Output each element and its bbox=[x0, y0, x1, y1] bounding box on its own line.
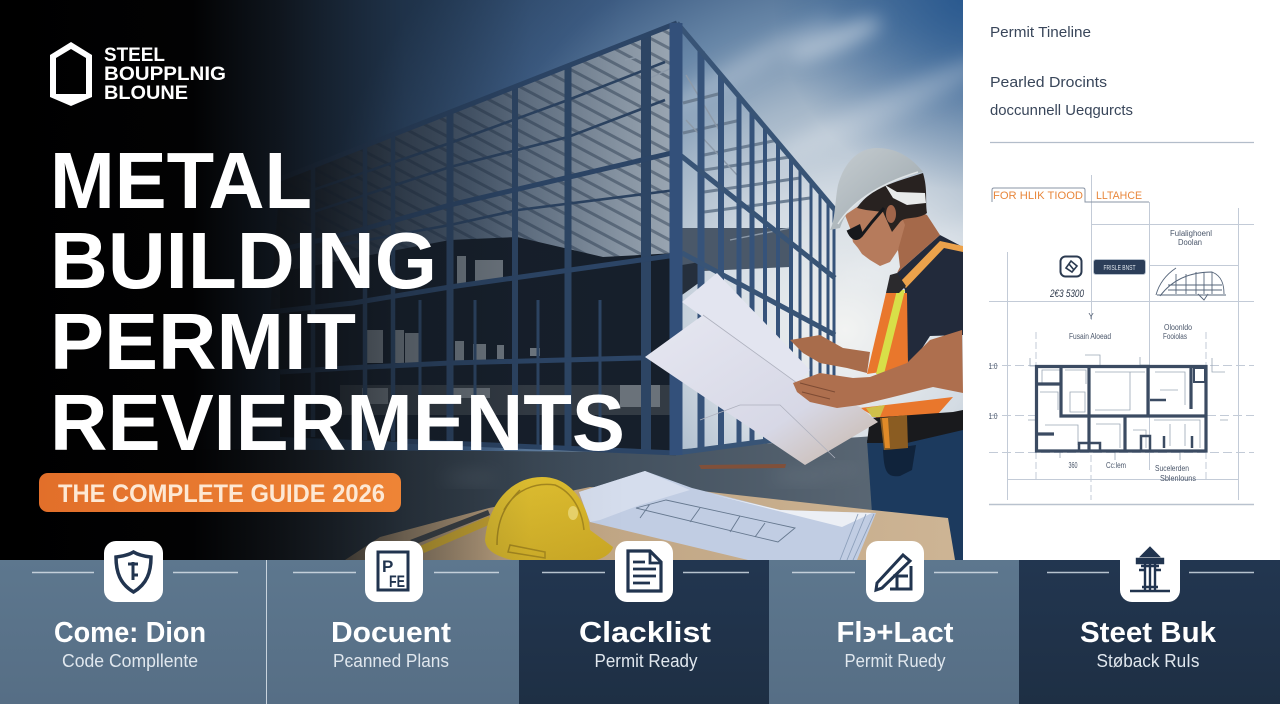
logo bbox=[50, 42, 226, 106]
blueprint annotations bbox=[988, 229, 1212, 483]
logo wordmark: BLOUNE bbox=[104, 83, 188, 104]
icon: checklist bbox=[615, 541, 673, 602]
card 4: fit act bbox=[769, 541, 1019, 704]
blueprint icon bbox=[1060, 256, 1082, 276]
title: PERMIT bbox=[50, 297, 356, 386]
blueprint annotations: 1:0 bbox=[988, 412, 998, 421]
panel: permit documents bbox=[963, 0, 1280, 560]
card 2: document bbox=[267, 541, 519, 704]
bright gaps in lower floors bbox=[340, 256, 675, 415]
blueprint annotations: 2€3 5300 bbox=[1049, 288, 1085, 300]
title bbox=[50, 136, 625, 467]
orange vest bbox=[867, 293, 908, 374]
jeans bbox=[867, 428, 963, 560]
left face glazing and roof deck bbox=[316, 28, 670, 264]
glasses bbox=[848, 208, 884, 238]
orange label bbox=[992, 188, 1149, 202]
bottom band bbox=[0, 541, 1280, 704]
panel: hero photo bbox=[0, 0, 1019, 560]
dark tag: FRISLE BNST bbox=[1104, 265, 1136, 272]
blueprint annotations: Fusain Aloead bbox=[1069, 332, 1111, 341]
card 5: steel build: Steet Buk bbox=[1080, 617, 1217, 649]
subtitle pill: THE COMPLETE GUIDE 2026 bbox=[58, 480, 385, 508]
panel heading text: Permit Tineline bbox=[990, 24, 1091, 41]
main beams bbox=[270, 23, 835, 453]
worker bbox=[645, 148, 963, 560]
icon: hexagon bbox=[50, 42, 92, 106]
title: METAL bbox=[50, 136, 312, 225]
right face columns bbox=[701, 51, 834, 450]
front arm and hand bbox=[793, 330, 963, 408]
logo wordmark: BOUPPLNIG bbox=[104, 64, 226, 85]
card 3: checklist bbox=[519, 541, 769, 704]
logo wordmark bbox=[104, 45, 226, 104]
dark interior bbox=[280, 237, 676, 453]
card 5: steel build bbox=[1019, 541, 1280, 704]
icon: steel tower bbox=[1120, 541, 1180, 602]
held plans bbox=[645, 273, 878, 465]
icon: shield bbox=[104, 541, 163, 602]
icon: document: P bbox=[382, 557, 393, 576]
blueprint annotations: Doolan bbox=[1178, 238, 1202, 247]
dark left gradient overlay bbox=[0, 0, 552, 560]
vest yellow stripe bbox=[876, 290, 905, 374]
title: REVIERMENTS bbox=[50, 378, 625, 467]
rear arm bbox=[790, 335, 870, 373]
card 1: code compliance bbox=[0, 541, 266, 704]
card 1: code compliance: Come: Dion bbox=[54, 617, 206, 649]
neck bbox=[897, 214, 940, 273]
corner column bbox=[670, 23, 682, 455]
floor plan bbox=[1028, 355, 1228, 460]
rusty steel on ground bbox=[699, 464, 786, 469]
blueprint annotations: Cc:lem bbox=[1106, 461, 1126, 470]
ground bbox=[210, 436, 872, 560]
orange label: FOR HLIK TIOOD bbox=[993, 190, 1083, 202]
panel heading text: doccunnell Ueqgurcts bbox=[990, 102, 1133, 119]
dark tag bbox=[1094, 260, 1146, 274]
card 3: checklist: Permit Ready bbox=[594, 651, 698, 671]
ground light patches bbox=[468, 476, 472, 479]
shirt bbox=[897, 235, 963, 370]
title: BUILDING bbox=[50, 216, 437, 305]
card 2: document: Pєanned Plans bbox=[333, 651, 449, 671]
blueprint annotations: 1:0 bbox=[988, 362, 998, 371]
thin rails bbox=[313, 62, 676, 245]
back frame visible through right face bbox=[625, 55, 810, 295]
icon: document: FE bbox=[389, 572, 405, 591]
card 4: fit act: Fl϶+Lact bbox=[836, 617, 954, 649]
blueprint annotations: Sblenlouns bbox=[1160, 474, 1196, 483]
ruler on table bbox=[410, 510, 491, 553]
panel heading text: Pearled Drocints bbox=[990, 74, 1107, 91]
logo wordmark: STEEL bbox=[104, 45, 165, 66]
card 2: document: Docuent bbox=[331, 617, 451, 649]
panel heading text bbox=[990, 24, 1133, 119]
collar shadow bbox=[886, 273, 906, 293]
orange label: LLTAHCE bbox=[1096, 190, 1142, 202]
yellow hard hat bbox=[485, 477, 613, 560]
table bbox=[345, 487, 955, 560]
plans on table bbox=[579, 471, 876, 560]
steel building frame bbox=[270, 23, 835, 455]
hair bbox=[857, 173, 927, 232]
head band bbox=[885, 185, 926, 205]
blueprint annotations: Sucelerden bbox=[1155, 464, 1189, 473]
blueprint grid bbox=[989, 175, 1254, 504]
tool pouch bbox=[880, 415, 908, 450]
face bbox=[845, 200, 905, 266]
ear bbox=[886, 205, 896, 223]
blueprint annotations: Y bbox=[1088, 312, 1094, 321]
card 3: checklist: Clacklist bbox=[579, 617, 711, 649]
sky bbox=[210, 0, 963, 452]
white hard hat bbox=[830, 148, 923, 230]
blueprint annotations: Fooiolas bbox=[1163, 332, 1187, 341]
icon: pencil and square bbox=[866, 541, 924, 602]
belt bbox=[867, 410, 963, 443]
blueprint annotations: Oloonldo bbox=[1164, 323, 1192, 332]
blueprint bbox=[988, 175, 1254, 504]
card 4: fit act: Permit Ruedy bbox=[844, 651, 946, 671]
blueprint annotations: 360 bbox=[1068, 461, 1078, 470]
card 1: code compliance: Code Compllente bbox=[62, 651, 198, 671]
card 5: steel build: Støback RuIs bbox=[1096, 651, 1200, 671]
machine sketch bbox=[1156, 268, 1226, 300]
icon: document bbox=[365, 541, 423, 602]
subtitle pill bbox=[39, 473, 401, 512]
blueprint annotations: Fulalighoenl bbox=[1170, 229, 1212, 238]
left face columns bbox=[313, 35, 646, 452]
